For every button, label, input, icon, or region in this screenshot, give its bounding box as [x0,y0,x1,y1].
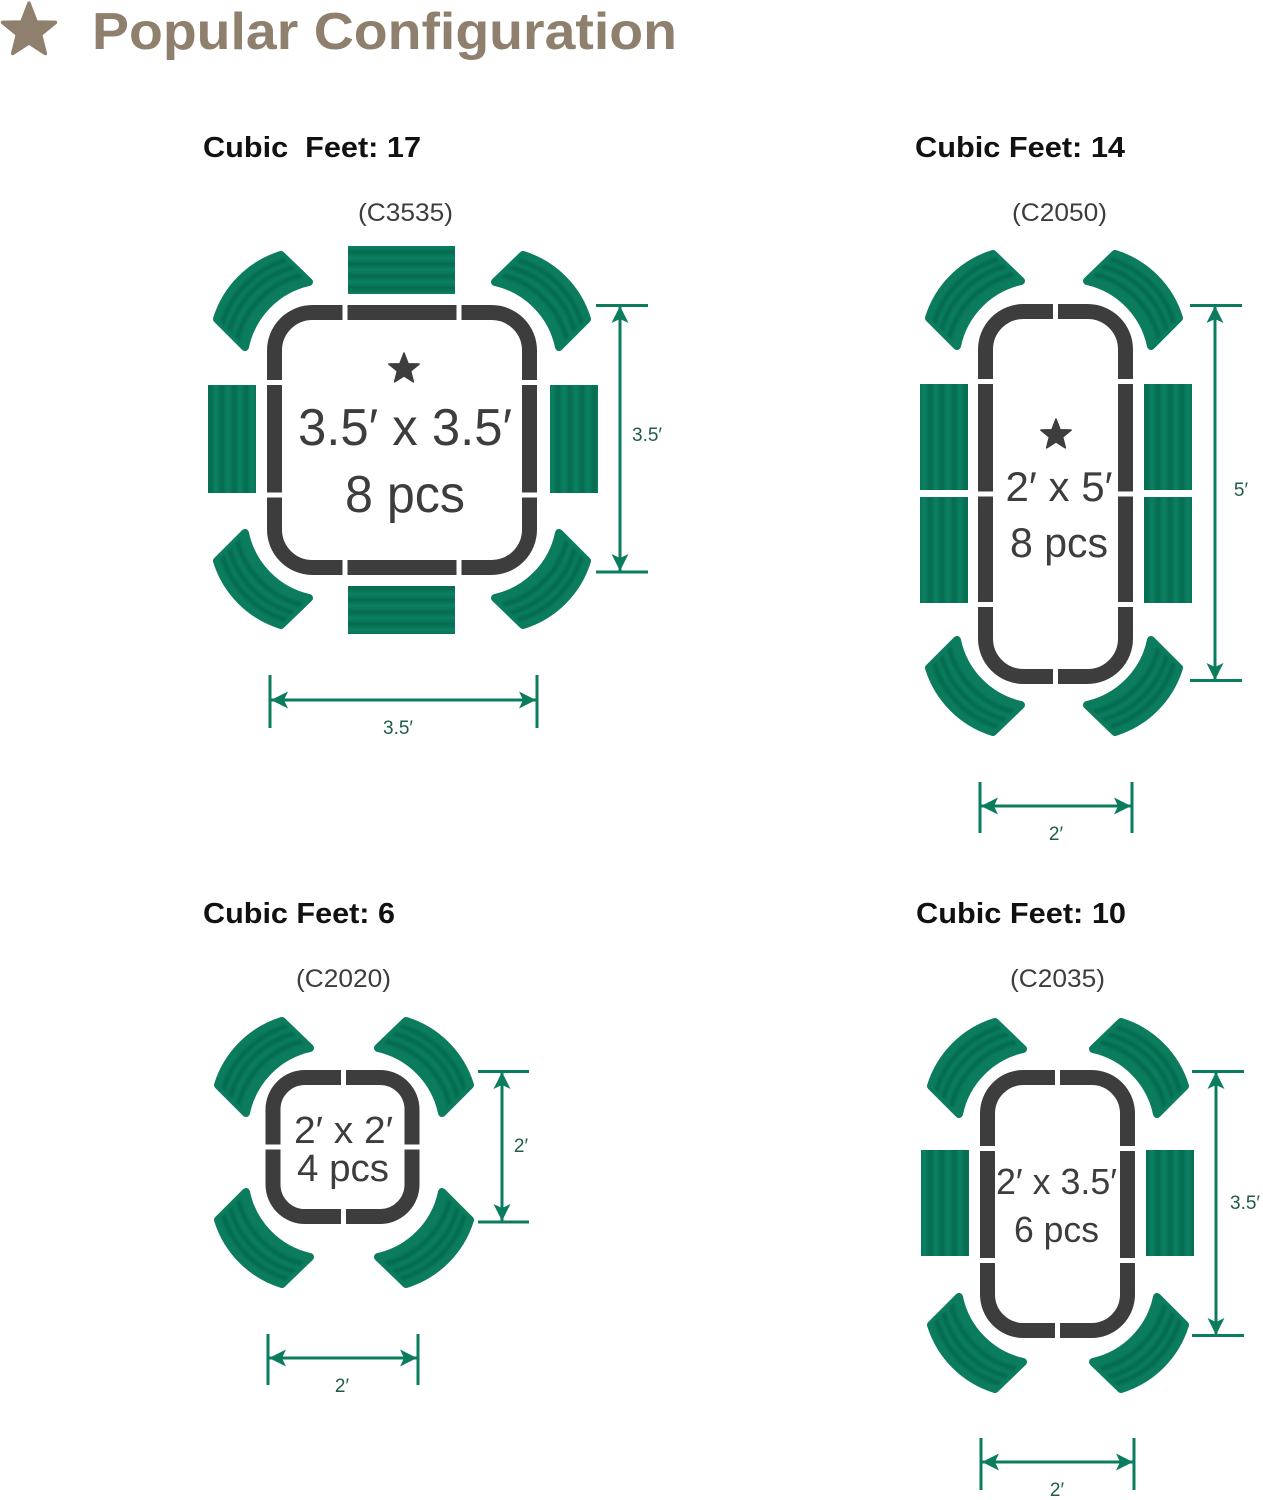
star marker [389,353,419,382]
width dimension [270,675,537,739]
size label: 2′ x 5′ [1006,463,1113,510]
star marker [1041,419,1071,448]
piece count: 4 pcs [297,1148,389,1190]
table outline [262,300,545,580]
width dimension [268,1334,418,1397]
title: Popular Configuration [92,3,677,61]
height dimension [1192,1072,1260,1336]
panel: 3.5 x 3.5 configuration [203,132,662,739]
heading: cubic feet 14: Cubic Feet: 14 [915,132,1125,164]
panel: 2 x 2 configuration [203,898,529,1397]
heading: cubic feet 10: Cubic Feet: 10 [916,898,1126,930]
piece count: 6 pcs [1014,1209,1099,1250]
panel: 2 x 5 configuration [915,132,1248,845]
straight seats [920,384,1192,603]
heading: cubic feet 6: Cubic Feet: 6 [203,898,395,930]
table outline [975,1064,1140,1345]
straight seats [921,1150,1194,1256]
model code C2050: (C2050) [1012,199,1107,227]
panel: 2 x 3.5 configuration [916,898,1260,1500]
heading: cubic feet 17: Cubic Feet: 17 [203,132,421,164]
table outline [260,1064,425,1230]
height dimension [596,306,662,572]
table outline [973,298,1140,690]
piece count: 8 pcs [1010,519,1108,566]
height dimension: 5′ [1234,480,1248,501]
corner seats [218,1021,470,1284]
height dimension [478,1072,529,1222]
width dimension: 2′ [1049,824,1063,845]
height dimension: 3.5′ [632,425,662,446]
size label: 3.5′ x 3.5′ [298,399,512,457]
model code C2035: (C2035) [1010,965,1105,993]
model code C2020: (C2020) [296,965,391,993]
model code C3535: (C3535) [358,199,453,227]
corner seats [217,255,587,625]
height dimension: 3.5′ [1230,1193,1260,1214]
width dimension [980,782,1132,845]
height dimension: 2′ [514,1136,528,1157]
piece count: 8 pcs [345,466,465,524]
straight seats [208,246,598,634]
width dimension: 2′ [335,1376,349,1397]
corner seats [929,254,1179,732]
width dimension [981,1438,1134,1500]
size label: 2′ x 2′ [294,1110,393,1152]
height dimension [1190,306,1248,680]
size label: 2′ x 3.5′ [996,1161,1117,1202]
width dimension: 3.5′ [383,718,413,739]
corner seats [931,1022,1185,1389]
icon: header star [3,3,55,54]
